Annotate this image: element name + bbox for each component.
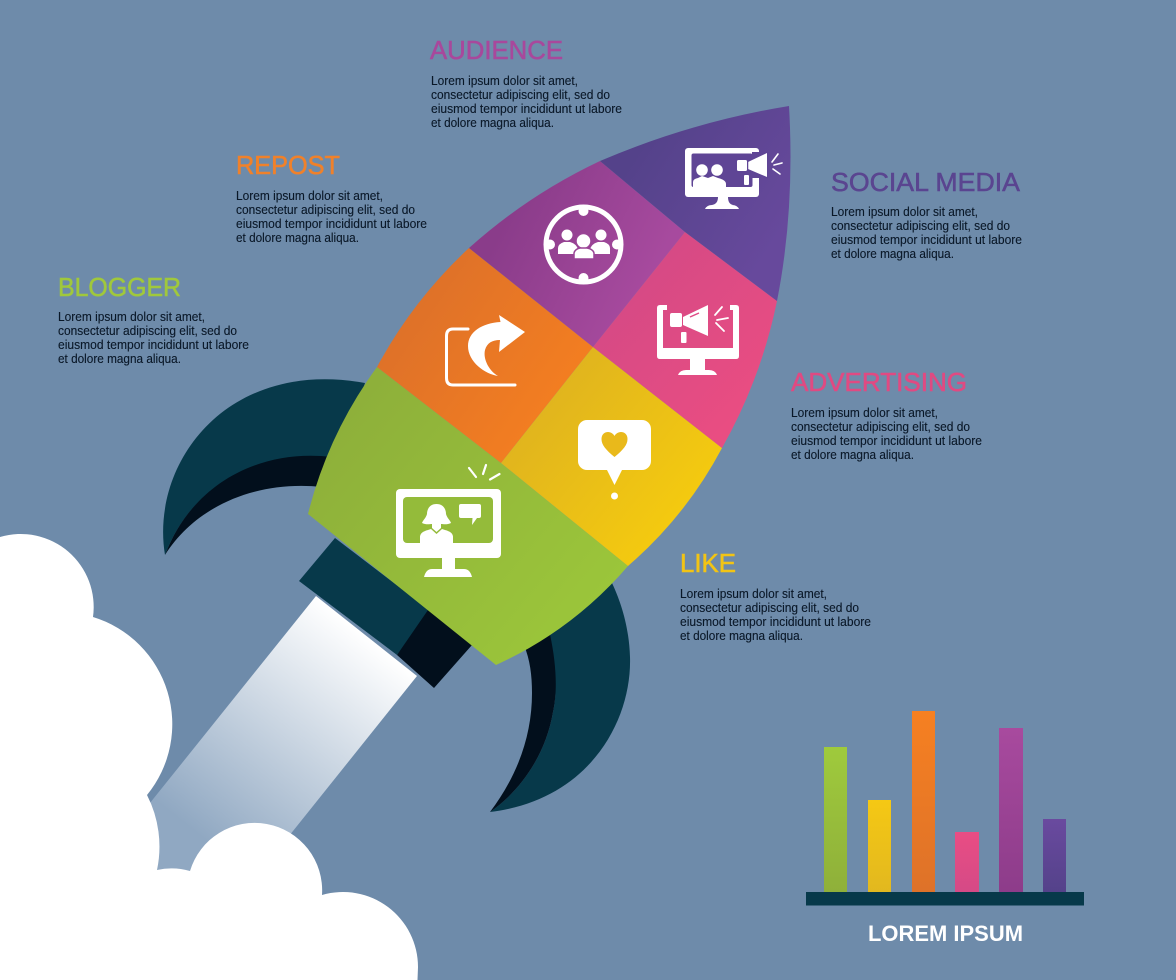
text block: blogger — [58, 272, 249, 366]
exhaust flame — [85, 596, 417, 916]
body: blogger: et dolore magna aliqua. — [58, 351, 181, 366]
heading: advertising: ADVERTISING — [791, 367, 967, 397]
body: blogger: eiusmod tempor incididunt ut labore — [58, 337, 249, 352]
heading: social media: SOCIAL MEDIA — [831, 167, 1021, 197]
text block: like — [680, 548, 871, 643]
body: advertising: consectetur adipiscing elit, sed do — [791, 419, 970, 434]
bar: magenta — [999, 728, 1023, 892]
left fin — [163, 379, 365, 555]
body: like — [680, 586, 871, 643]
body: repost — [236, 188, 427, 245]
bar: pink — [955, 832, 979, 892]
text block: advertising — [791, 367, 982, 462]
segment: repost orange — [377, 248, 593, 463]
body: advertising — [791, 405, 982, 462]
body: audience: consectetur adipiscing elit, sed do — [431, 87, 610, 102]
icon: advertising monitor with megaphone — [657, 305, 739, 375]
body: like: eiusmod tempor incididunt ut labore — [680, 614, 871, 629]
text block: repost — [236, 150, 427, 245]
icon: like speech bubble with heart — [578, 420, 651, 500]
right fin — [490, 583, 630, 812]
body: blogger: consectetur adipiscing elit, sed do — [58, 323, 237, 338]
body: blogger: Lorem ipsum dolor sit amet, — [58, 309, 205, 324]
body: like: Lorem ipsum dolor sit amet, — [680, 586, 827, 601]
icon: repost arrow — [446, 315, 525, 385]
body: social media: consectetur adipiscing elit, sed do — [831, 218, 1010, 233]
body: social media: eiusmod tempor incididunt ut labore — [831, 232, 1022, 247]
icon: social media monitor with megaphone — [685, 148, 782, 209]
bar: purple — [1043, 819, 1066, 892]
heading: repost: REPOST — [236, 150, 340, 180]
body: audience: Lorem ipsum dolor sit amet, — [431, 73, 578, 88]
body: audience: et dolore magna aliqua. — [431, 115, 554, 130]
clouds — [0, 534, 418, 980]
icon: audience target — [545, 206, 622, 283]
body: repost: Lorem ipsum dolor sit amet, — [236, 188, 383, 203]
icon: blogger monitor — [396, 465, 501, 577]
chart baseline — [806, 892, 1084, 906]
text block: audience — [430, 35, 622, 130]
segment: blogger green — [308, 367, 628, 665]
segment: advertising pink — [593, 232, 777, 448]
bar chart — [806, 711, 1084, 946]
body: advertising: eiusmod tempor incididunt ut labore — [791, 433, 982, 448]
body: like: et dolore magna aliqua. — [680, 628, 803, 643]
body: audience — [431, 73, 622, 130]
body: repost: eiusmod tempor incididunt ut labore — [236, 216, 427, 231]
body: audience: eiusmod tempor incididunt ut labore — [431, 101, 622, 116]
segment: social media purple — [600, 106, 790, 301]
body: social media — [831, 204, 1022, 261]
body: repost: et dolore magna aliqua. — [236, 230, 359, 245]
body: repost: consectetur adipiscing elit, sed do — [236, 202, 415, 217]
body: advertising: Lorem ipsum dolor sit amet, — [791, 405, 938, 420]
bar: yellow — [868, 800, 891, 892]
chart label: LOREM IPSUM — [868, 921, 1023, 946]
bar: orange — [912, 711, 935, 892]
segment: like yellow — [501, 347, 722, 566]
segment: audience magenta — [469, 161, 685, 347]
body: social media: et dolore magna aliqua. — [831, 246, 954, 261]
heading: blogger: BLOGGER — [58, 272, 181, 302]
rocket nozzle — [299, 538, 472, 688]
bar: green — [824, 747, 847, 892]
body: blogger — [58, 309, 249, 366]
text block: social media — [831, 167, 1022, 261]
body: social media: Lorem ipsum dolor sit amet, — [831, 204, 978, 219]
body: advertising: et dolore magna aliqua. — [791, 447, 914, 462]
body: like: consectetur adipiscing elit, sed do — [680, 600, 859, 615]
heading: like: LIKE — [680, 548, 736, 578]
heading: audience: AUDIENCE — [430, 35, 563, 65]
rocket body — [308, 106, 790, 665]
